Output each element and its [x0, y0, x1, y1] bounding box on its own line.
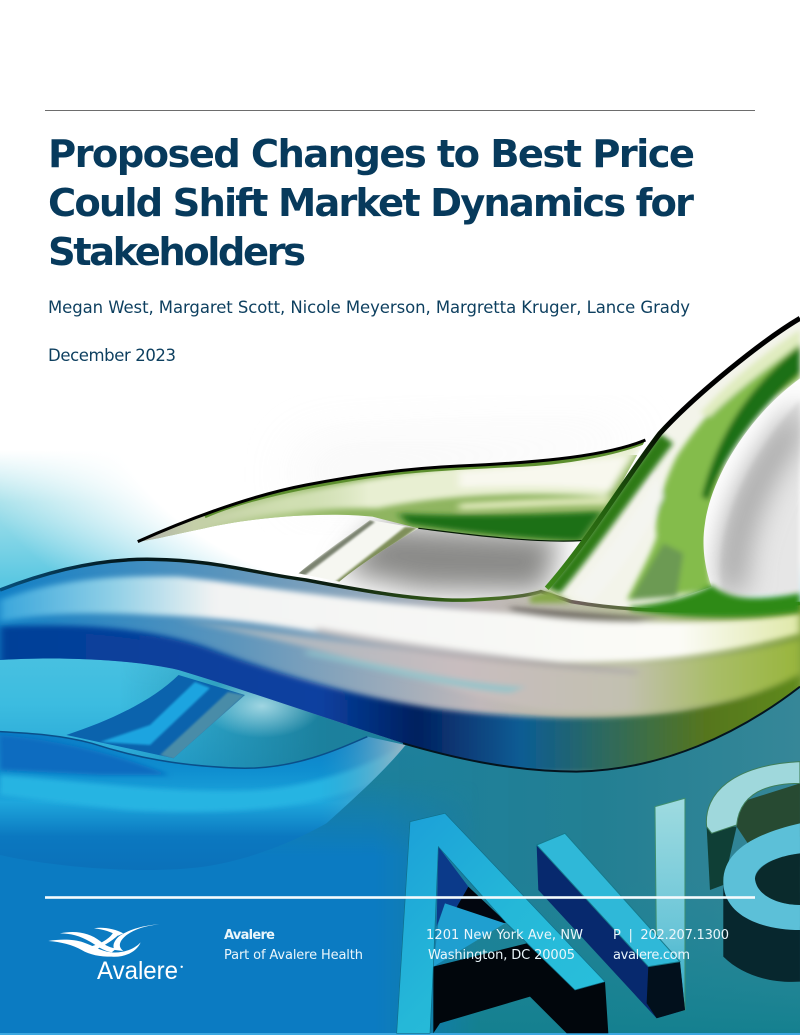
footer company: Part of Avalere Health: [224, 948, 363, 963]
green upper branch: [130, 440, 660, 550]
lower blue connector: [66, 675, 245, 758]
icon: Avalere logo: [48, 924, 183, 985]
title: Could Shift Market Dynamics for: [48, 181, 694, 226]
footer address: Washington, DC 20005: [428, 948, 575, 963]
background letters: Avalere 3D logotype: [397, 762, 800, 1033]
background gradient: [0, 456, 800, 1035]
letter v: [537, 798, 685, 1018]
lower blue ribbon: [0, 730, 406, 870]
date: December 2023: [48, 346, 176, 365]
authors: Megan West, Margaret Scott, Nicole Meyerson, Margretta Kruger, Lance Grady: [48, 298, 690, 317]
logo swoosh mark: [48, 924, 159, 957]
footer address: [426, 928, 583, 963]
footer contact: avalere.com: [613, 948, 690, 963]
footer contact: [613, 928, 729, 963]
footer company: [224, 928, 363, 963]
footer contact: P | 202.207.1300: [613, 928, 729, 943]
top rule: [45, 110, 755, 111]
letter a: [706, 762, 800, 982]
green foot where arm meets ribbon: [530, 585, 800, 617]
main silver ribbon blending blue to green: [0, 550, 800, 780]
logo wordmark: Avalere: [97, 957, 178, 985]
footer address: 1201 New York Ave, NW: [426, 928, 583, 943]
letter A: [397, 813, 608, 1033]
title: [48, 132, 695, 275]
footer company: Avalere: [224, 928, 275, 943]
title: Stakeholders: [48, 230, 306, 275]
footer rule: [45, 896, 755, 899]
upper pale connector: [298, 520, 418, 582]
soft grey shadows behind ribbon: [300, 400, 800, 595]
green vertical arm: [540, 310, 800, 615]
title: Proposed Changes to Best Price: [48, 132, 695, 177]
